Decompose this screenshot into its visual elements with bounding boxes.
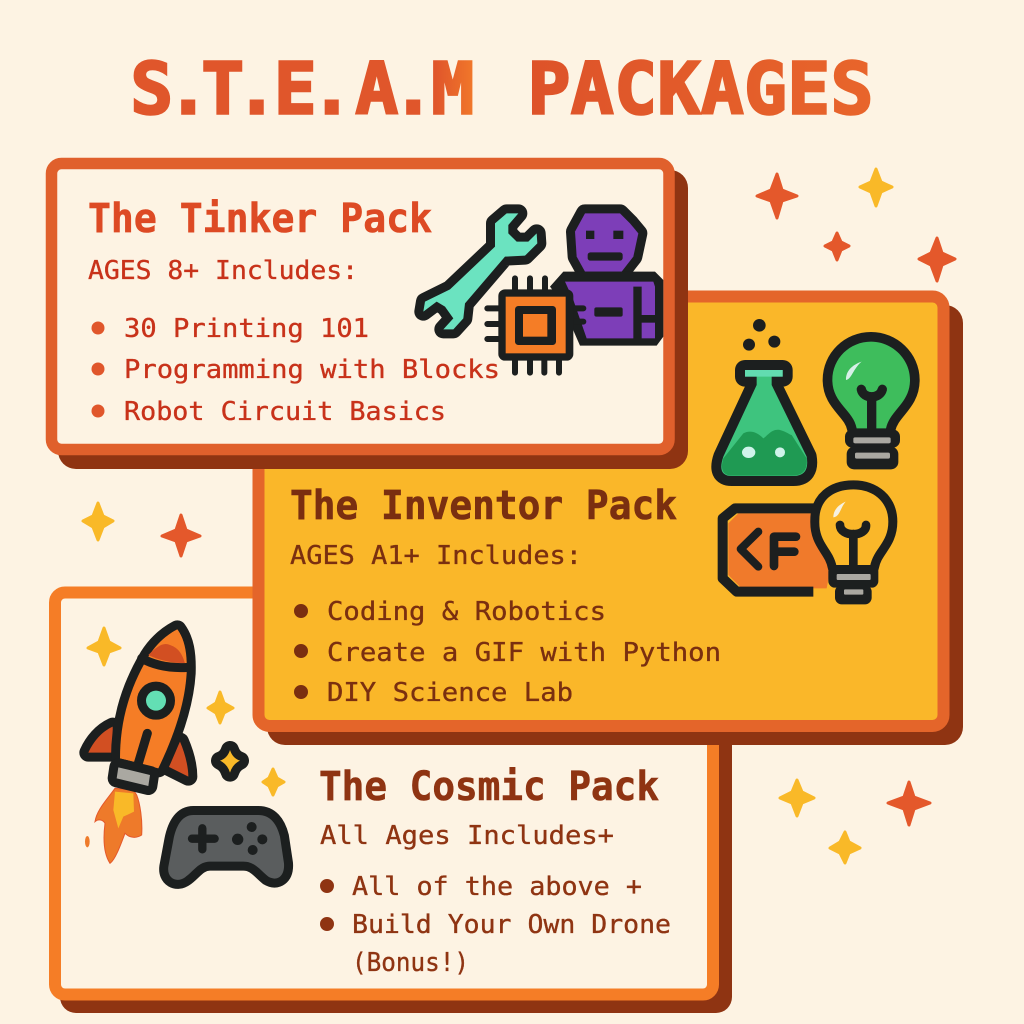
icon: yellow light bulb bbox=[819, 489, 888, 604]
title: S.T.E.A.M PACKAGES bbox=[130, 48, 873, 130]
list: cosmic bbox=[320, 872, 671, 978]
icon: wrench bbox=[423, 213, 537, 329]
panel: the cosmic pack bbox=[55, 592, 732, 1013]
icon: chip bbox=[487, 278, 583, 373]
sparkles: lower right bbox=[780, 780, 930, 863]
subheading: inventor: AGES A1+ Includes: bbox=[290, 541, 582, 571]
subheading: tinker: AGES 8+ Includes: bbox=[88, 256, 358, 286]
panel: the inventor pack bbox=[258, 296, 963, 745]
list: tinker bbox=[92, 314, 500, 427]
icon: flask bbox=[721, 319, 807, 476]
list: tinker: Robot Circuit Basics bbox=[124, 397, 446, 427]
icon: rocket bbox=[85, 629, 188, 863]
list: tinker: 30 Printing 101 bbox=[124, 314, 369, 344]
list: tinker: Programming with Blocks bbox=[124, 355, 500, 385]
heading: tinker: The Tinker Pack bbox=[88, 196, 432, 242]
subheading: cosmic: All Ages Includes+ bbox=[320, 821, 614, 851]
icon: game controller bbox=[168, 815, 284, 880]
icon: code tag bbox=[723, 508, 830, 592]
icon: robot bbox=[550, 213, 663, 346]
list: inventor: DIY Science Lab bbox=[327, 678, 573, 708]
sparkles: middle left bbox=[83, 503, 200, 556]
heading: inventor: The Inventor Pack bbox=[290, 483, 677, 529]
list: inventor: Create a GIF with Python bbox=[327, 638, 721, 668]
list: cosmic: All of the above + bbox=[352, 872, 642, 902]
list: cosmic: (Bonus!) bbox=[352, 948, 469, 978]
heading: cosmic: The Cosmic Pack bbox=[319, 764, 659, 810]
sparkles: upper right bbox=[757, 169, 955, 281]
list: inventor: Coding & Robotics bbox=[327, 597, 606, 627]
panel: the tinker pack bbox=[52, 164, 688, 469]
icons: small sparkles near rocket bbox=[88, 628, 284, 795]
icon: black sparkle bbox=[220, 750, 240, 773]
list: inventor bbox=[294, 597, 721, 708]
icon: green light bulb bbox=[832, 342, 910, 469]
list: cosmic: Build Your Own Drone bbox=[352, 910, 671, 940]
